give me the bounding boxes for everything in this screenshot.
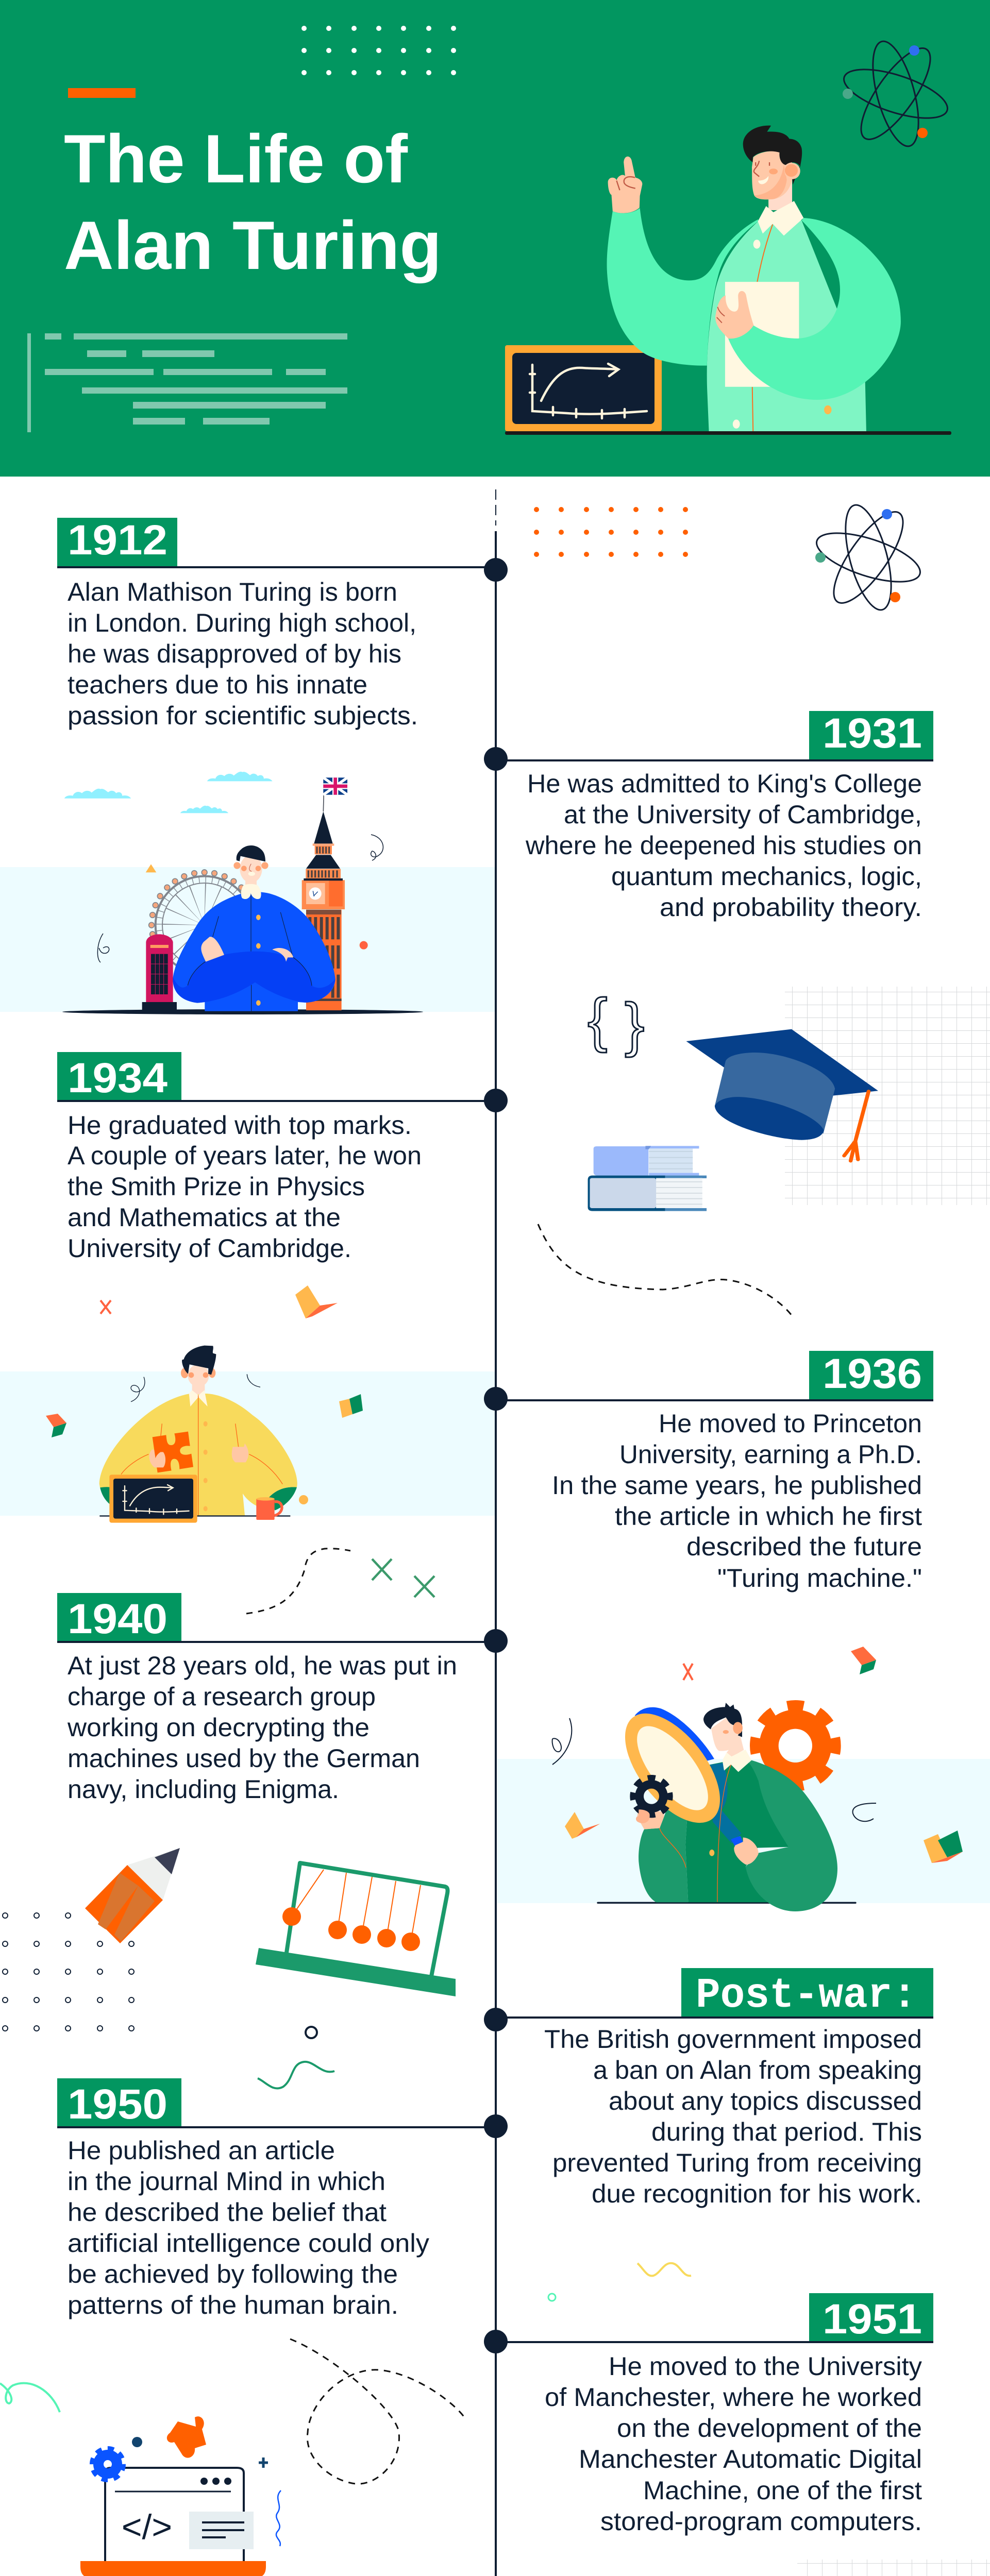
- illustration: laptop and code: [80, 2416, 281, 2576]
- text: [525, 769, 922, 922]
- icon: atom 2: [811, 500, 926, 615]
- text: In the same years, he published: [552, 1471, 922, 1500]
- green x marks: [372, 1559, 434, 1597]
- green squiggle: [258, 2062, 334, 2089]
- laptop base: [80, 2561, 266, 2576]
- icon: small book: [295, 1285, 338, 1318]
- text: He published an article: [68, 2136, 335, 2165]
- text: Alan Mathison Turing is born: [68, 578, 397, 606]
- text: in the journal Mind in which: [68, 2167, 385, 2196]
- text: University of Cambridge.: [68, 1234, 351, 1263]
- text: He was admitted to King's College: [527, 769, 922, 798]
- dashed curve: [538, 1224, 792, 1316]
- man in blue: [173, 845, 335, 1011]
- text: University, earning a Ph.D.: [619, 1440, 922, 1469]
- icon: curly braces: }: [625, 991, 645, 1058]
- orange dots: [534, 507, 688, 557]
- text: working on decrypting the: [67, 1713, 370, 1742]
- node: [484, 1387, 508, 1411]
- title: [64, 121, 442, 284]
- text: passion for scientific subjects.: [68, 701, 418, 730]
- entry: 1940: [57, 1593, 508, 1804]
- text: He moved to the University: [609, 2352, 922, 2381]
- connector: [506, 2341, 933, 2343]
- icon: atom: [838, 37, 953, 151]
- text: a ban on Alan from speaking: [593, 2056, 922, 2084]
- icon: graduation cap: [686, 1029, 878, 1161]
- entry: 1912: [57, 517, 508, 730]
- text: at the University of Cambridge,: [564, 800, 922, 829]
- large gear: [755, 1705, 836, 1786]
- text: patterns of the human brain.: [68, 2291, 398, 2319]
- text: machines used by the German: [68, 1744, 420, 1773]
- text: [68, 578, 418, 730]
- fragments: [565, 1647, 963, 1863]
- text: teachers due to his innate: [68, 670, 367, 699]
- text: be achieved by following the: [68, 2260, 398, 2289]
- text: and Mathematics at the: [68, 1203, 341, 1232]
- entry: 1934: [57, 1052, 508, 1263]
- dashed loop: [290, 2339, 466, 2484]
- year label: 1951: [823, 2296, 922, 2343]
- entry: 1950: [57, 2078, 508, 2319]
- text: Manchester Automatic Digital: [579, 2445, 922, 2473]
- text: [544, 2025, 922, 2208]
- dot pattern: [301, 26, 456, 75]
- ferris wheel: [149, 870, 254, 974]
- node: [484, 747, 508, 771]
- small x: [100, 1300, 111, 1314]
- icon: newton's cradle: [256, 1863, 456, 1996]
- illustration: presenter: [607, 126, 901, 431]
- text: the article in which he first: [615, 1502, 922, 1531]
- text: on the development of the: [617, 2414, 922, 2443]
- node: [484, 1089, 508, 1112]
- text: and probability theory.: [660, 893, 922, 922]
- entry: 1951: [484, 2293, 933, 2536]
- node: [484, 2008, 508, 2031]
- year label: 1940: [68, 1596, 167, 1642]
- text: charge of a research group: [68, 1682, 376, 1711]
- small ring: [306, 2027, 317, 2038]
- doodles: [97, 835, 383, 962]
- icon: outlined dot grid: [3, 1913, 134, 2031]
- blue gear: [92, 2449, 123, 2480]
- entry: 1936: [484, 1350, 933, 1592]
- text: navy, including Enigma.: [68, 1775, 339, 1804]
- text: At just 28 years old, he was put in: [68, 1651, 457, 1680]
- connector: [57, 1641, 484, 1643]
- grid panel 2: [797, 2560, 990, 2576]
- text: of Manchester, where he worked: [545, 2383, 922, 2412]
- connector: [57, 1100, 484, 1102]
- year label: 1936: [823, 1350, 922, 1397]
- year label: 1931: [823, 710, 922, 757]
- text: quantum mechanics, logic,: [611, 862, 922, 891]
- icon: curly braces: [588, 986, 645, 1058]
- fragments: [46, 1394, 363, 1504]
- title: The Life of: [64, 121, 408, 197]
- year label: 1912: [68, 517, 167, 564]
- teal curve: [0, 2383, 60, 2412]
- icon: code lines: [27, 333, 347, 432]
- timeline: [495, 489, 497, 2576]
- doodles: [552, 1718, 876, 1821]
- connector: [57, 2126, 484, 2128]
- label: Post-war:: [696, 1972, 917, 2020]
- illustration: green man with magnifier: [497, 1647, 990, 1911]
- text: [67, 1651, 457, 1804]
- text: stored-program computers.: [600, 2507, 922, 2536]
- text: where he deepened his studies on: [525, 831, 922, 860]
- panel: header: [0, 0, 990, 477]
- year label: 1950: [68, 2081, 167, 2128]
- text: [545, 2352, 922, 2536]
- phone box: [142, 934, 177, 1011]
- text: the Smith Prize in Physics: [68, 1172, 365, 1201]
- connector: [506, 759, 933, 761]
- clouds: [64, 772, 273, 813]
- teal ring: [548, 2294, 556, 2301]
- text: [68, 1111, 422, 1263]
- text: during that period. This: [651, 2117, 922, 2146]
- document: [189, 2512, 254, 2549]
- node: [484, 2114, 508, 2138]
- floor line: [505, 431, 951, 435]
- text: due recognition for his work.: [592, 2179, 922, 2208]
- big ben: [302, 777, 347, 1010]
- text: [68, 2136, 429, 2319]
- yellow squiggle: [637, 2263, 691, 2276]
- connector: [57, 566, 484, 568]
- node: [484, 1629, 508, 1653]
- text: A couple of years later, he won: [68, 1141, 422, 1170]
- ground: [62, 1009, 423, 1014]
- connector: [506, 1399, 933, 1401]
- text: He moved to Princeton: [659, 1409, 922, 1438]
- code symbol: </>: [122, 2507, 172, 2547]
- text: about any topics discussed: [609, 2087, 922, 2115]
- entry: 1931: [484, 710, 933, 922]
- dashed curve 2: [246, 1549, 350, 1614]
- text: "Turing machine.": [717, 1564, 922, 1592]
- illustration: London: [0, 772, 495, 1014]
- text: He graduated with top marks.: [68, 1111, 412, 1140]
- grid panel 1: [785, 987, 990, 1205]
- text: he described the belief that: [68, 2198, 387, 2227]
- year label: 1934: [68, 1055, 167, 1101]
- text: The British government imposed: [544, 2025, 922, 2054]
- illustration: yellow man: [0, 1346, 495, 1523]
- text: [552, 1409, 922, 1592]
- text: he was disapproved of by his: [68, 639, 401, 668]
- orange puzzle piece: [167, 2416, 206, 2458]
- icon: pencil: [85, 1848, 180, 1943]
- text: artificial intelligence could only: [68, 2229, 429, 2258]
- icon: curly braces: {: [588, 986, 608, 1053]
- text: prevented Turing from receiving: [552, 2148, 922, 2177]
- node: [484, 558, 508, 582]
- icon: books: [588, 1146, 707, 1211]
- icon: blackboard: [505, 345, 662, 431]
- node: [484, 2330, 508, 2353]
- accent bar: [68, 88, 136, 98]
- text: Machine, one of the first: [643, 2476, 922, 2505]
- entry: post-war: [484, 1968, 933, 2208]
- text: in London. During high school,: [68, 608, 416, 637]
- text: described the future: [686, 1532, 922, 1561]
- title: Alan Turing: [64, 208, 442, 284]
- connector: [506, 2016, 933, 2019]
- small gear: [633, 1778, 670, 1815]
